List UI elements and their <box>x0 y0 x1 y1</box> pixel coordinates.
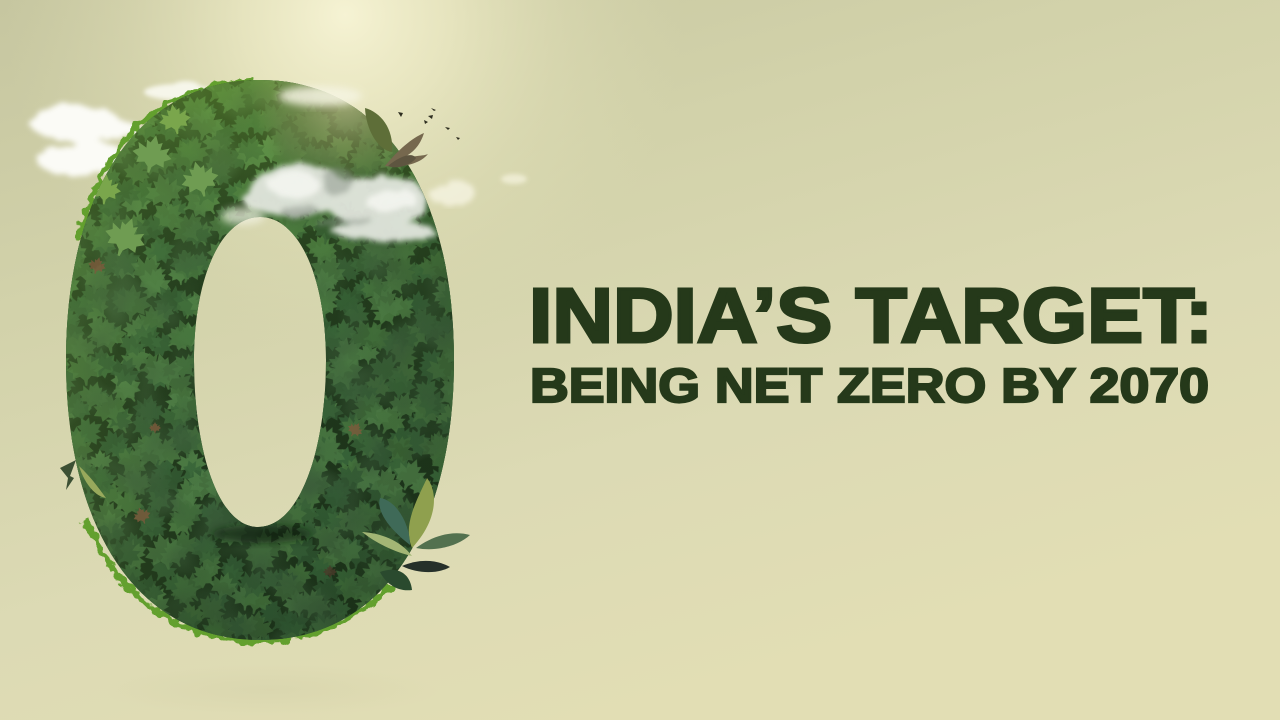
highlight leaves upper left <box>96 104 218 256</box>
cloud: right of zero <box>430 180 474 204</box>
cloud: top small <box>144 81 212 100</box>
cloud: inside hole top <box>221 207 265 225</box>
dark shadow under the hole <box>212 525 312 543</box>
bronze leaf accents <box>86 255 366 578</box>
plant: left side <box>60 460 106 498</box>
heading line 2: BEING NET ZERO BY 2070 <box>530 360 1209 413</box>
cloud: small far right <box>501 174 527 184</box>
background clouds <box>29 81 527 204</box>
cloud shading <box>280 168 371 226</box>
birds <box>398 108 460 140</box>
plant: tropical leaves bottom right <box>362 478 470 590</box>
heading line 1: INDIA’S TARGET: <box>529 273 1213 359</box>
zero fringe: bright foliage edge <box>78 80 395 640</box>
cloud: upper left <box>29 101 142 175</box>
plant: top right <box>365 108 428 167</box>
cloud: wrapped over zero <box>242 164 437 242</box>
cloud mass <box>242 164 437 242</box>
zero body of leaves <box>66 80 454 640</box>
title <box>529 273 1213 413</box>
cloud highlights <box>266 171 416 213</box>
cloud: top of zero <box>278 86 362 106</box>
leafy zero figure <box>50 60 470 650</box>
